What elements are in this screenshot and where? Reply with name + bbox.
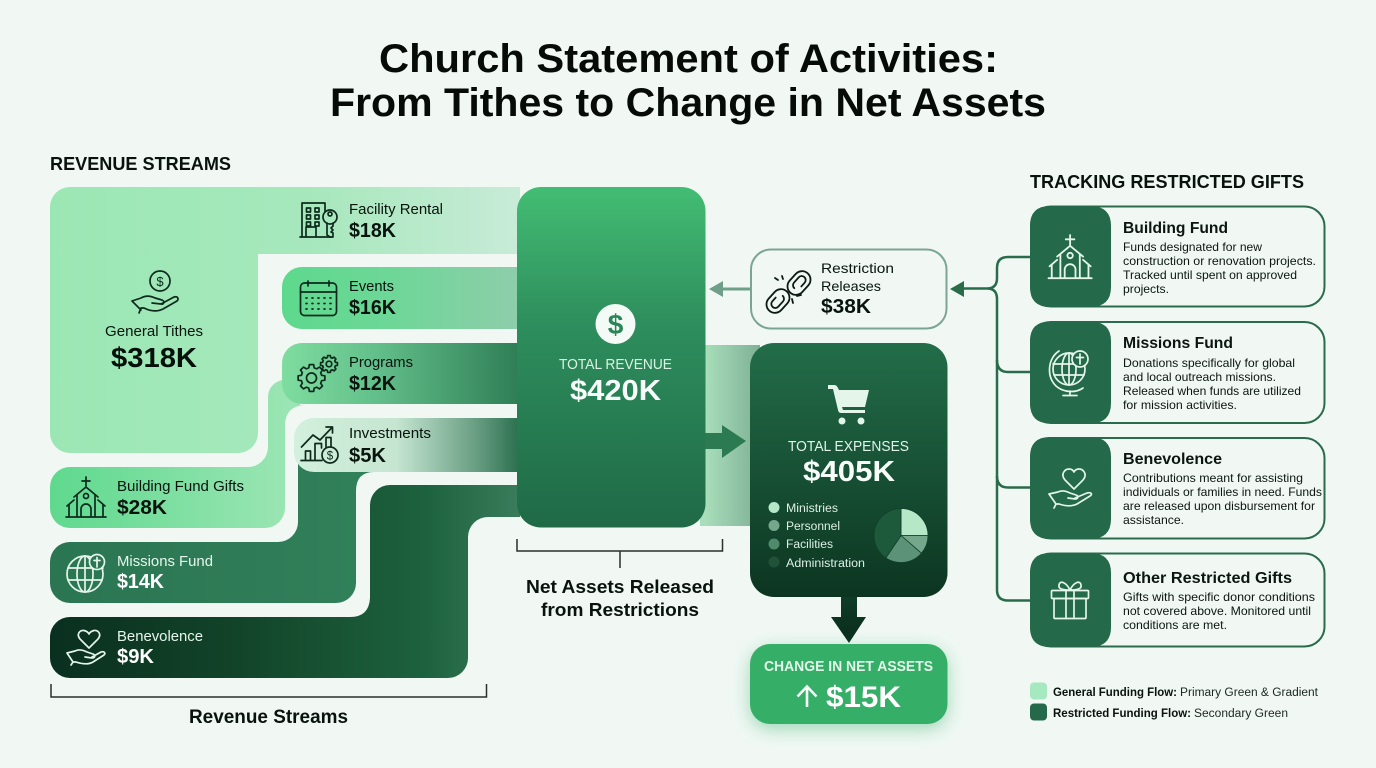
legend: expense categories: Personnel — [786, 521, 840, 533]
text: building fund: Building Fund — [1123, 220, 1228, 237]
legend: expense categories: Facilities — [786, 539, 833, 551]
label: events — [349, 279, 397, 319]
label: restriction releases: Releases — [821, 278, 881, 294]
text: building fund: construction or renovation projects. — [1123, 254, 1316, 268]
value: total revenue: $420K — [570, 375, 661, 407]
text: benevolence: Contributions meant for assisting — [1123, 471, 1303, 485]
label: restriction releases: Restriction — [821, 260, 894, 276]
label: events: $16K — [349, 297, 397, 319]
icon: heart in hand — [67, 630, 105, 665]
heading: tracking restricted gifts: TRACKING RESTRICTED GIFTS — [1030, 172, 1304, 192]
label: investments: Investments — [349, 426, 431, 442]
label: net assets released — [526, 576, 714, 620]
icon: globe with cross — [67, 554, 104, 592]
label: revenue streams: Revenue Streams — [189, 707, 348, 728]
text: building fund: projects. — [1123, 282, 1169, 296]
label: programs: Programs — [349, 355, 413, 371]
icon: gears — [298, 356, 337, 391]
label: general tithes — [105, 324, 203, 373]
label: missions fund: Missions Fund — [117, 554, 213, 570]
icon: hand with coin: $ — [156, 274, 164, 289]
text: benevolence: assistance. — [1123, 513, 1184, 527]
label: building fund gifts: Building Fund Gifts — [117, 479, 244, 495]
label: net assets released: from Restrictions — [541, 599, 699, 620]
label: change in net assets: CHANGE IN NET ASSETS — [764, 659, 933, 675]
icon: calendar — [300, 281, 336, 316]
card: missions fund — [1030, 322, 1324, 424]
text: building fund — [1123, 220, 1316, 296]
legend: funding flows: Primary Green & Gradient — [1180, 687, 1319, 699]
bracket: net assets released — [517, 539, 722, 568]
label: facility rental: $18K — [349, 220, 397, 242]
stream: general tithes and facility rental — [50, 187, 520, 453]
label: investments — [349, 426, 431, 467]
heading: revenue streams: REVENUE STREAMS — [50, 154, 231, 174]
icon: shopping cart — [828, 385, 869, 424]
label: facility rental — [349, 202, 443, 242]
arrow: releases to revenue — [709, 281, 751, 297]
text: other restricted gifts: conditions are met. — [1123, 618, 1227, 632]
label: total revenue: TOTAL REVENUE — [559, 357, 672, 373]
stream: programs — [282, 343, 520, 404]
text: benevolence: individuals or families in need. Funds — [1123, 485, 1322, 499]
text: other restricted gifts: Gifts with specific donor conditions — [1123, 590, 1315, 604]
label: general tithes: General Tithes — [105, 324, 203, 340]
icon: building and key — [300, 203, 337, 237]
label: restriction releases: $38K — [821, 296, 872, 318]
label: programs: $12K — [349, 373, 397, 395]
stream: missions fund — [50, 460, 378, 603]
icon: hand with coin — [132, 271, 178, 313]
label: missions fund — [117, 554, 213, 593]
label: building fund gifts: $28K — [117, 497, 168, 519]
card: building fund — [1030, 206, 1324, 307]
text: other restricted gifts: Other Restricted Gifts — [1123, 570, 1292, 587]
icon: dollar circle — [596, 304, 636, 344]
text: benevolence: Benevolence — [1123, 451, 1222, 468]
legend: expense categories — [768, 502, 865, 570]
icon: broken chain link — [763, 268, 814, 316]
arrow: revenue to expenses — [705, 425, 746, 458]
label: benevolence: $9K — [117, 646, 155, 668]
icon: dollar circle: $ — [608, 309, 624, 340]
text: missions fund: and local outreach missions. — [1123, 370, 1276, 384]
label: events: Events — [349, 279, 394, 295]
value: total expenses: $405K — [803, 456, 895, 488]
title — [330, 37, 1046, 125]
label: restriction releases — [821, 260, 894, 318]
text: benevolence — [1123, 451, 1322, 527]
stream: investments — [294, 418, 520, 472]
card: benevolence — [1030, 437, 1324, 539]
icon: up arrow — [798, 686, 816, 707]
text: other restricted gifts: not covered above. Monitored until — [1123, 604, 1311, 618]
label: benevolence — [117, 629, 203, 668]
label: net assets released: Net Assets Released — [526, 576, 714, 597]
chart: expense pie — [874, 508, 928, 563]
legend: expense categories: Ministries — [786, 503, 838, 515]
label: investments: $5K — [349, 445, 387, 467]
stream: building fund gifts — [50, 380, 305, 528]
label: total expenses: TOTAL EXPENSES — [788, 439, 909, 455]
icon: heart in hand — [1049, 469, 1091, 508]
panel: restriction releases — [751, 250, 946, 328]
panel: total expenses — [750, 343, 948, 597]
text: missions fund: Donations specifically for global — [1123, 356, 1295, 370]
text: missions fund: for mission activities. — [1123, 398, 1237, 412]
legend: funding flows — [1030, 682, 1319, 720]
icon: church — [1048, 235, 1092, 278]
bracket: revenue streams — [51, 684, 486, 697]
panel: change in net assets — [750, 644, 948, 724]
legend: expense categories: Administration — [786, 558, 865, 570]
card: other restricted gifts — [1030, 553, 1324, 647]
label: benevolence: Benevolence — [117, 629, 203, 645]
icon: growth chart with coin — [301, 427, 338, 463]
text: missions fund — [1123, 335, 1301, 412]
icon: globe on stand — [1050, 351, 1088, 396]
text: other restricted gifts — [1123, 570, 1315, 632]
label: facility rental: Facility Rental — [349, 202, 443, 218]
icon: church — [66, 477, 106, 517]
text: missions fund: Missions Fund — [1123, 335, 1233, 352]
icon: gift box — [1052, 582, 1088, 618]
label: building fund gifts — [117, 479, 244, 519]
connector: restricted gifts tree — [960, 257, 1030, 600]
icon: growth chart with coin: $ — [327, 450, 334, 462]
title: From Tithes to Change in Net Assets — [330, 81, 1046, 125]
text: benevolence: are released upon disbursement for — [1123, 499, 1315, 513]
stream: events — [282, 267, 520, 329]
arrow: gifts to releases — [950, 281, 964, 297]
legend: funding flows: Restricted Funding Flow: — [1053, 708, 1191, 720]
label: general tithes: $318K — [111, 342, 197, 373]
title: Church Statement of Activities: — [379, 37, 998, 81]
legend: funding flows: General Funding Flow: — [1053, 687, 1177, 699]
text: building fund: Funds designated for new — [1123, 240, 1262, 254]
flow band: revenue to expenses — [700, 345, 760, 526]
label: missions fund: $14K — [117, 571, 165, 593]
stream: benevolence — [50, 485, 520, 678]
legend: funding flows: Secondary Green — [1194, 708, 1288, 720]
arrow: expenses to change — [831, 597, 866, 643]
text: building fund: Tracked until spent on approved — [1123, 268, 1297, 282]
panel: total revenue — [517, 187, 706, 528]
text: missions fund: Released when funds are utilized — [1123, 384, 1301, 398]
value: change in net assets: $15K — [826, 681, 901, 714]
label: programs — [349, 355, 413, 395]
